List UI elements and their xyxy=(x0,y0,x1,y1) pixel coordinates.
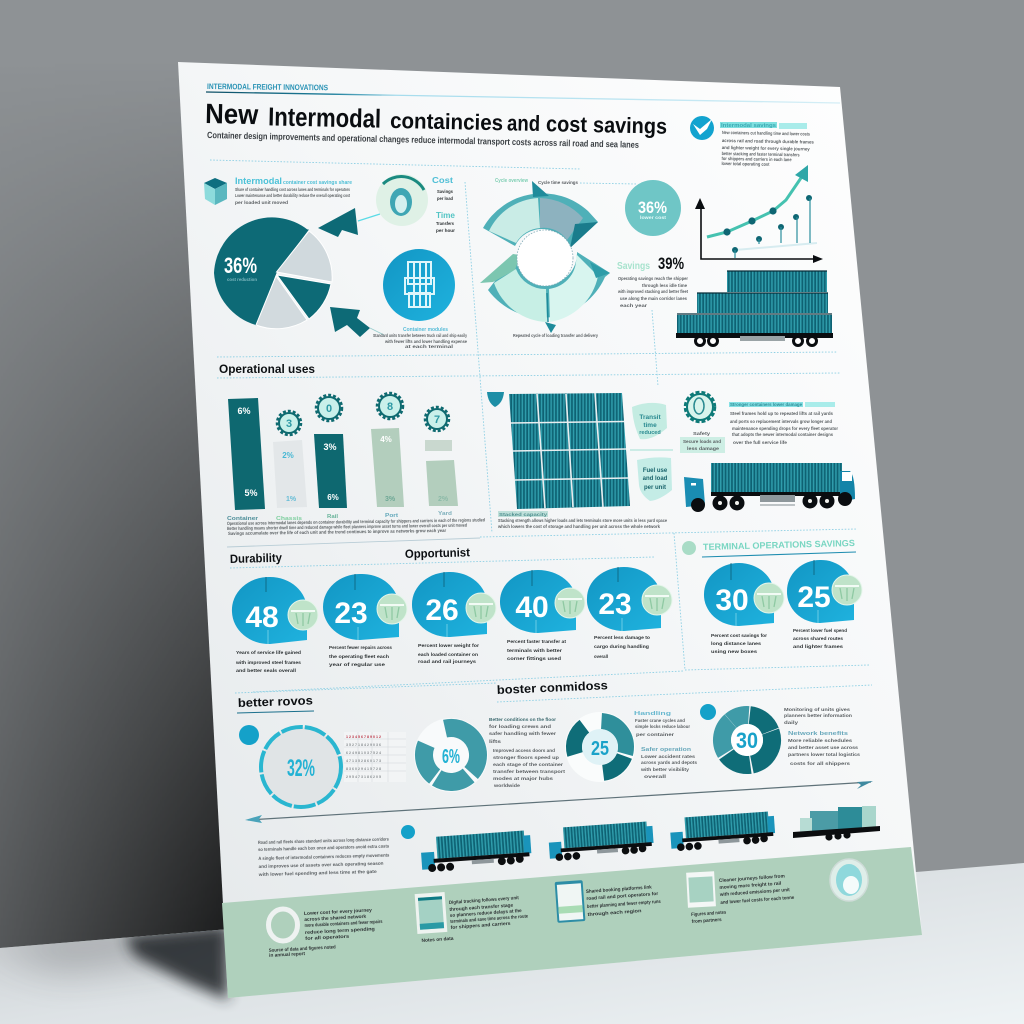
stat bubble 36% xyxy=(625,180,681,236)
stat bubble 36%: 36% xyxy=(638,198,667,217)
icon: pale badge xyxy=(376,174,428,226)
text: item 1: reduce long term spending xyxy=(305,926,375,936)
bar labels xyxy=(227,511,452,522)
heading: centre: boster conmidoss xyxy=(497,678,608,697)
donut: 25: 25 xyxy=(591,738,609,760)
small stat labels: Time xyxy=(436,211,456,220)
illustration: container train xyxy=(676,271,833,346)
stat text xyxy=(617,276,688,308)
label card: Safety xyxy=(693,431,711,436)
heading and text: Lower maintenance and better durability reduce the overall operating cost xyxy=(235,193,350,198)
pie chart: cost reduction xyxy=(227,277,257,282)
pie chart: 36% xyxy=(224,253,257,278)
heading: Operational uses xyxy=(219,362,315,376)
bar labels: Rail xyxy=(327,514,339,520)
stat notes: Percent fewer repairs across xyxy=(329,645,392,651)
donut notes: stronger floors speed up xyxy=(493,755,559,760)
stat notes: road and rail journeys xyxy=(418,659,476,665)
caption: Container modules xyxy=(403,327,448,333)
panel: better conditions xyxy=(237,678,873,823)
grid caption: Stacked capacity xyxy=(499,512,548,517)
stat 39%: Savings xyxy=(617,261,650,272)
stat notes: Years of service life gained xyxy=(236,650,301,656)
bar chart: 6% xyxy=(237,406,251,416)
intro text xyxy=(721,130,814,168)
text: item 1: for all operators xyxy=(305,934,350,942)
donut notes: lifts xyxy=(489,739,502,744)
bar notes xyxy=(227,517,485,536)
circular arrow: lower xyxy=(480,252,610,333)
stat 39%: 39% xyxy=(658,254,684,273)
title: and xyxy=(507,110,540,136)
intro text: and lighter weight for every single journey xyxy=(722,145,810,152)
shield: lower: Fuel use xyxy=(643,468,668,474)
stat notes: with improved steel frames xyxy=(235,660,301,666)
truck 3 xyxy=(669,811,776,852)
stat 30 xyxy=(704,563,784,626)
shield: upper: Transit xyxy=(639,414,661,421)
small stat labels: Cost xyxy=(432,176,453,185)
arrow: long double-headed xyxy=(245,781,873,823)
small stat labels: Transfers xyxy=(436,221,454,227)
bar chart: 6% xyxy=(327,493,339,502)
intro text: for shippers and carriers in each lane xyxy=(722,156,792,162)
text block: Steel frames hold up to repeated lifts at rail yards xyxy=(730,411,833,416)
donut notes: Monitoring of units gives xyxy=(784,707,851,712)
panel: durability stats xyxy=(230,538,862,674)
gauge: 32% xyxy=(287,755,315,782)
shield: upper xyxy=(632,403,667,439)
poster sheet xyxy=(178,62,922,998)
small stat labels xyxy=(432,176,456,234)
text block: over the full service life xyxy=(733,440,787,445)
text: item 2: for shippers and carriers xyxy=(450,921,511,931)
donut notes: and better asset use across xyxy=(788,745,859,750)
truck 1 xyxy=(420,830,532,873)
stat 48: 48 xyxy=(245,601,279,634)
text: item 4: and lower fuel costs for each tonne xyxy=(720,895,795,906)
donut notes: planners better information xyxy=(784,713,852,718)
shield: upper: time xyxy=(643,422,657,429)
icon: cube xyxy=(204,178,227,205)
donut notes: Handling xyxy=(634,711,671,717)
text: item 4 xyxy=(689,873,796,925)
bar notes: Operational use across intermodal lanes depends on container durability and terminal capacity for shippers and carriers in each of the regions studied xyxy=(227,517,485,526)
bar labels: Container xyxy=(227,516,258,522)
donut notes: transfer between transport xyxy=(493,769,566,774)
ring caption: Repeated cycle of loading transfer and delivery xyxy=(513,333,598,338)
stat 25 xyxy=(787,560,862,623)
section divider lines xyxy=(210,160,872,702)
intro heading: Intermodal savings xyxy=(721,123,776,129)
bullet xyxy=(401,825,415,839)
ring centre xyxy=(517,230,573,286)
subtitle: Container design improvements and operational changes reduce intermodal transport costs across rail road and sea lanes xyxy=(207,130,639,150)
text: item 1 xyxy=(267,907,384,959)
text: item 2 xyxy=(419,895,530,944)
text: item 1: Lower cost for every journey xyxy=(304,907,372,917)
gear badge xyxy=(685,392,715,422)
heading: Opportunity: Opportunist xyxy=(405,545,470,561)
donut notes: per container xyxy=(636,732,674,737)
title: containcies xyxy=(390,108,503,135)
stat 30: 30 xyxy=(715,584,749,617)
stat notes: and better seals overall xyxy=(236,668,296,674)
text block: that adopts the newer intermodal container designs xyxy=(732,432,833,437)
notes: so terminals handle each box once and operators avoid extra costs xyxy=(258,844,390,852)
icon: globe xyxy=(830,859,868,901)
donut notes: with better visibility xyxy=(640,767,689,772)
text: item 2: Digital tracking follows every unit xyxy=(449,895,519,906)
bar chart: 3% xyxy=(385,496,396,503)
arrow: lower xyxy=(330,307,384,337)
donut notes: More reliable schedules xyxy=(788,738,853,743)
title: New xyxy=(205,98,259,130)
panel: operational bars xyxy=(219,362,485,536)
right heading xyxy=(682,538,856,557)
caption: with fewer lifts and lower handling expense xyxy=(384,339,467,344)
text: item 3: better planning and fewer empty runs xyxy=(587,899,661,910)
stat notes: overall xyxy=(594,654,608,660)
donut: 30 xyxy=(700,704,782,775)
circular arrow: upper xyxy=(483,181,598,248)
text block xyxy=(729,402,838,445)
stat 26 xyxy=(412,572,496,637)
donut notes: worldwide xyxy=(493,783,521,788)
gear badges xyxy=(277,393,449,435)
shield: lower xyxy=(637,457,672,501)
header kicker: INTERMODAL FREIGHT INNOVATIONS xyxy=(207,82,329,92)
donut: 25 xyxy=(565,712,635,782)
footer band xyxy=(222,847,922,998)
bar labels: Chassis xyxy=(276,516,302,522)
donut notes: Network benefits xyxy=(788,731,848,737)
icon: blue container badge xyxy=(383,249,455,321)
truck 2 xyxy=(548,821,654,862)
donut notes: safer handling with fewer xyxy=(489,731,556,736)
captions top: Cycle overview xyxy=(495,178,529,184)
truck 4: flatbed with pale containers xyxy=(793,806,880,841)
stat 23 second: 23 xyxy=(598,588,632,621)
heading and text: Intermodal xyxy=(235,176,282,186)
data table: 4 7 1 3 5 2 8 6 0 1 7 3 xyxy=(346,759,381,763)
intro text: lower total operating cost xyxy=(721,161,770,167)
right heading: TERMINAL OPERATIONS SAVINGS xyxy=(703,538,855,552)
icon: shield xyxy=(487,392,504,407)
donut notes: Better conditions on the floor xyxy=(489,717,556,722)
text: item 2: Notes on data xyxy=(421,936,454,944)
heading: left: better rovos xyxy=(238,693,313,710)
text: item 2: terminals and save time across the route xyxy=(450,914,529,925)
gear badges: 7 xyxy=(434,414,440,426)
stat notes: terminals with better xyxy=(507,648,562,654)
stat text: Operating savings reach the shipper xyxy=(618,276,688,281)
stat 40 xyxy=(500,570,585,633)
stat text: with improved stacking and better fleet xyxy=(617,289,688,294)
panel: container stacks xyxy=(487,392,855,529)
bar notes: Better handling means shorter dwell time and reduced damage while fleet planners improve asset turns and lower overall costs per unit moved xyxy=(227,523,467,531)
icon: tablet 3 xyxy=(686,871,716,908)
text: item 4: with reduced emissions per unit xyxy=(719,887,790,898)
text block: Stronger containers lower damage xyxy=(730,402,802,407)
label card: Secure loads and xyxy=(683,439,721,444)
donut notes: daily xyxy=(784,720,799,725)
stat notes: Percent faster transfer at xyxy=(507,639,566,645)
grid caption: which lowers the cost of storage and handling per unit across the whole network xyxy=(497,524,660,529)
text: item 2: so planners reduce delays at the xyxy=(450,908,522,919)
intro text: across rail and road through durable frames xyxy=(722,138,814,145)
donut notes: Lower accident rates xyxy=(641,754,696,759)
data table: 3 5 2 7 1 8 4 2 9 0 3 6 xyxy=(346,743,381,747)
bar chart xyxy=(228,398,458,510)
bar chart: 2% xyxy=(282,451,294,460)
intro text: better stacking and faster terminal transfers xyxy=(722,151,800,157)
caption: at each terminal xyxy=(405,344,453,349)
caption xyxy=(373,327,467,349)
label card xyxy=(680,431,725,453)
captions top xyxy=(495,178,637,185)
data table: 6 2 4 9 8 1 0 3 7 5 2 4 xyxy=(346,751,381,755)
stat notes xyxy=(235,628,847,674)
text: item 3: through each region xyxy=(587,908,642,918)
donut notes: Faster crane cycles and xyxy=(635,718,685,723)
donut: 6% xyxy=(413,717,489,793)
stat notes: corner fittings used xyxy=(507,656,561,662)
text: item 3: road rail and port operators for xyxy=(586,891,659,902)
donut notes: simple locks reduce labour xyxy=(635,724,690,729)
text: item 4: moving more freight to rail xyxy=(719,881,781,891)
small stat labels: per load xyxy=(437,196,453,202)
donut notes: Safer operation xyxy=(641,747,692,753)
donut: 30: 30 xyxy=(736,728,758,753)
stat notes: Percent lower weight for xyxy=(418,643,479,649)
stat text: use along the main corridor lanes xyxy=(620,296,687,301)
intro text: New containers cut handling time and lower costs xyxy=(722,130,810,137)
title: Intermodal xyxy=(268,101,381,134)
stat 39% xyxy=(617,254,684,273)
title: cost xyxy=(546,111,588,137)
title xyxy=(205,98,667,140)
text: item 1: Source of data and figures noted xyxy=(269,944,336,954)
line chart xyxy=(695,165,823,263)
bar labels: Yard xyxy=(438,511,452,517)
donut notes: modes at major hubs xyxy=(493,776,554,781)
shield: lower: and load xyxy=(643,476,668,482)
donut notes: partners lower total logistics xyxy=(788,752,861,757)
panel: fleet trucks xyxy=(257,806,880,877)
stat notes: each loaded container on xyxy=(418,652,478,658)
heading: Durability: Durability xyxy=(230,551,282,566)
stat notes: year of regular use xyxy=(329,662,385,668)
connector xyxy=(630,449,673,451)
text: item 3: Shared booking platforms link xyxy=(586,884,652,895)
notes: and improves use of assets over each operating season xyxy=(258,861,384,869)
icon: ring xyxy=(268,909,298,941)
stat notes: using new boxes xyxy=(711,649,757,655)
stat notes: long distance lanes xyxy=(711,641,761,647)
header rule xyxy=(206,92,840,103)
icon: tablet 2 xyxy=(555,880,585,923)
stat 25: 25 xyxy=(797,581,831,614)
shield: lower: per unit xyxy=(644,485,666,491)
heading and text: per loaded unit moved xyxy=(235,200,288,205)
container grid xyxy=(509,393,630,509)
donut notes: Improved access doors and xyxy=(493,748,555,753)
panel: cost share xyxy=(204,174,467,349)
panel: footer band items xyxy=(267,859,868,959)
gear badges: 0 xyxy=(326,403,332,415)
bar chart: 2% xyxy=(438,496,449,503)
small stat labels: Savings xyxy=(437,189,453,195)
text: item 1: across the shared network xyxy=(304,914,367,923)
title: savings xyxy=(593,112,667,139)
heading and text: container cost savings share xyxy=(283,180,352,186)
data table: 2 9 5 4 7 3 1 8 6 2 0 5 xyxy=(346,775,381,779)
bar labels: Port xyxy=(385,513,398,519)
gear badges: 8 xyxy=(387,401,393,413)
stat 26: 26 xyxy=(425,594,459,627)
heading rule xyxy=(237,711,314,713)
small stat labels: per hour xyxy=(436,228,455,234)
donut notes: overall xyxy=(644,774,666,779)
stat text: through less idle time xyxy=(642,283,687,288)
bar chart: 3% xyxy=(323,442,337,452)
stat notes: Percent cost savings for xyxy=(711,633,767,639)
text: item 4: Cleaner journeys follow from xyxy=(719,873,785,884)
illustration: container truck xyxy=(684,463,855,512)
label card: less damage xyxy=(687,446,719,451)
stat 48 xyxy=(232,577,318,644)
donut notes: for loading crews and xyxy=(489,724,551,729)
stat 23 second xyxy=(587,567,672,631)
shield: upper: reduced xyxy=(639,430,661,436)
text: item 4: from partners xyxy=(692,917,722,925)
bar chart: 1% xyxy=(286,496,297,503)
panel: top-right intro xyxy=(690,116,814,168)
heading and text xyxy=(235,176,352,205)
donut notes: across yards and depots xyxy=(641,760,697,765)
icon: check badge xyxy=(690,116,714,140)
notes: with lower fuel spending and less time at the gate xyxy=(258,869,377,877)
heading and text: Share of container handling cost across lanes and terminals for operators xyxy=(235,187,350,192)
text: item 2: through each transfer stage xyxy=(449,903,514,913)
grid caption xyxy=(497,511,667,529)
caption: Standard units transfer between truck rail and ship easily xyxy=(373,333,467,338)
stat notes: across shared routes xyxy=(793,636,843,642)
data table: 1 2 3 4 5 6 7 8 9 0 1 2 xyxy=(346,735,381,739)
stat 23: 23 xyxy=(334,597,368,630)
text: item 3 xyxy=(586,884,662,918)
stat notes: and lighter frames xyxy=(793,644,843,650)
stat bubble 36%: lower cost xyxy=(640,215,667,220)
text: item 1: more durable containers and fewer repairs xyxy=(304,919,383,929)
gauge xyxy=(239,725,341,807)
pie chart xyxy=(214,217,332,329)
bar chart: 5% xyxy=(244,488,258,498)
captions top: Cycle time savings xyxy=(538,180,578,185)
bar chart: 4% xyxy=(380,435,392,444)
stat 23 xyxy=(323,574,407,640)
data table xyxy=(344,732,406,782)
notes: Road and rail fleets share standard units across long distance corridors xyxy=(258,837,389,845)
text: item 1: in annual report xyxy=(269,951,306,959)
donut notes: each stage of the container xyxy=(493,762,563,767)
stat text: each year xyxy=(620,303,647,308)
arrow: upper xyxy=(318,208,380,237)
text block: and ports so replacement intervals grow longer and xyxy=(730,419,832,424)
bar notes: Savings accumulate over the life of each unit and the trend continues to improve as networks grow each year xyxy=(228,528,446,536)
icon: tablet 1 xyxy=(415,892,447,934)
text: item 4: Figures and notes xyxy=(691,910,727,918)
panel: circular flow xyxy=(480,178,688,338)
gear badges: 3 xyxy=(286,418,292,430)
notes xyxy=(257,837,390,877)
notes: A single fleet of intermodal containers reduces empty movements xyxy=(258,853,390,861)
donut notes xyxy=(489,707,861,788)
stat notes: Percent less damage to xyxy=(594,635,650,641)
text block: maintenance spending drops for every fleet operator xyxy=(732,426,838,431)
stat notes: cargo during handling xyxy=(594,644,649,650)
data table: 8 3 6 0 2 9 4 1 5 7 2 8 xyxy=(346,767,381,771)
stat 40: 40 xyxy=(515,591,549,624)
donut notes: costs for all shippers xyxy=(790,761,851,766)
donut: 6%: 6% xyxy=(442,746,460,768)
stat notes: the operating fleet each xyxy=(329,654,389,660)
stat notes: Percent lower fuel spend xyxy=(793,628,847,634)
grid caption: Stacking strength allows higher loads and lets terminals store more units in less yard space xyxy=(498,518,667,523)
